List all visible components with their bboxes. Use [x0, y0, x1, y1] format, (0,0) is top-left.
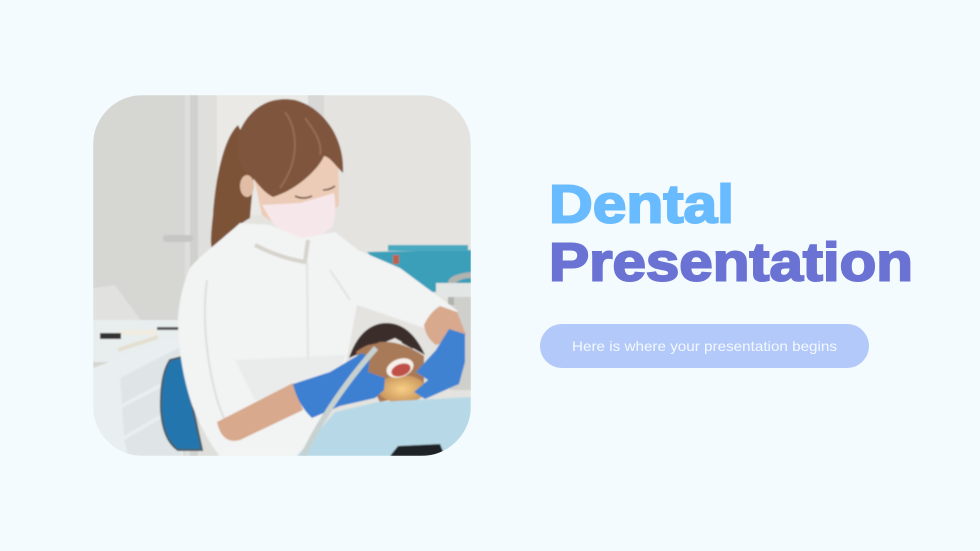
patient sheet	[297, 397, 471, 456]
patient	[349, 323, 426, 403]
hair	[237, 99, 343, 197]
dental handpiece tube	[303, 348, 376, 456]
dark clothing at the bottom	[390, 444, 445, 456]
photo backdrop: clinic walls and door	[93, 95, 471, 456]
subtitle pill	[540, 324, 869, 368]
photo: dentist treating a patient	[93, 95, 471, 456]
teal storage box	[367, 245, 471, 390]
subtitle text: Here is where your presentation begins	[572, 338, 837, 354]
dentist forearms	[217, 306, 466, 441]
blue chair	[161, 357, 202, 450]
title	[549, 174, 913, 292]
title line: Dental: Dental	[549, 174, 734, 234]
title line: Presentation: Presentation	[549, 232, 913, 292]
white coat	[178, 223, 458, 456]
counter and drawers	[93, 285, 183, 456]
ponytail	[211, 125, 255, 248]
coat collar and folds	[205, 240, 350, 420]
surgical mask	[262, 193, 335, 240]
blue gloves	[293, 329, 465, 418]
face and ear	[239, 155, 340, 221]
